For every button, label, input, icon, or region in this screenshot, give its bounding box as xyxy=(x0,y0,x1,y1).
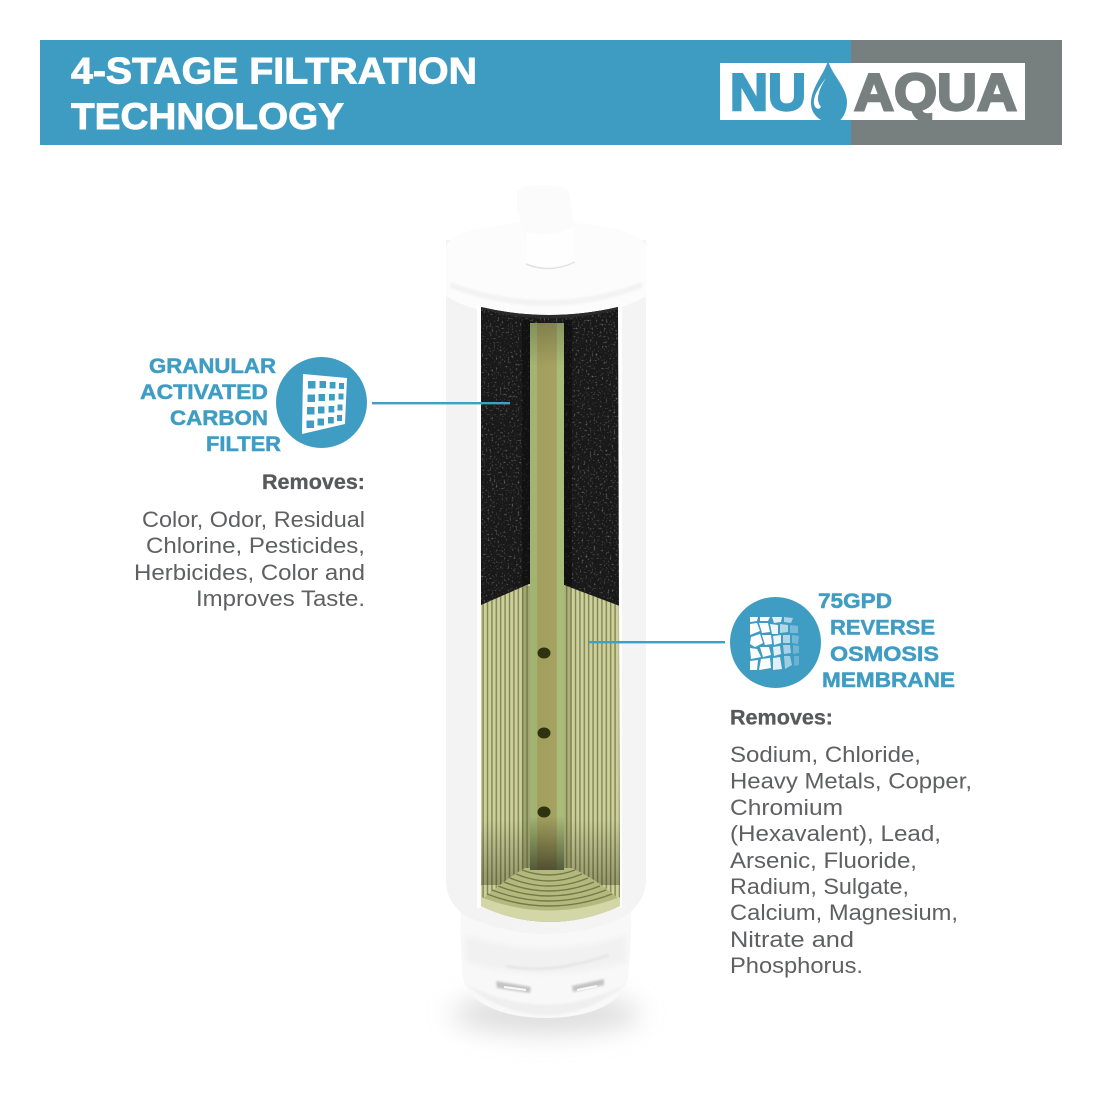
text block: membrane removes: Removes: xyxy=(730,706,833,730)
front disc xyxy=(481,897,620,923)
callout line: membrane xyxy=(589,641,725,643)
inner wall trim xyxy=(477,306,482,908)
heading: granular activated carbon filter: ACTIVATED xyxy=(140,380,268,404)
filter cartridge cutaway xyxy=(446,185,646,1034)
text block: membrane removes: Calcium, Magnesium, xyxy=(730,900,958,925)
text block: membrane removes: Phosphorus. xyxy=(730,953,863,978)
text block: membrane removes: Nitrate and xyxy=(730,927,854,952)
floor shadow xyxy=(451,994,641,1034)
text block: membrane removes: (Hexavalent), Lead, xyxy=(730,821,941,846)
text block: carbon filter removes: Improves Taste. xyxy=(196,586,365,611)
heading: 75GPD reverse osmosis membrane: 75GPD xyxy=(818,589,892,613)
logo: Nu Aqua: AQUA xyxy=(854,64,1017,122)
center tube xyxy=(530,323,564,870)
header banner xyxy=(40,40,1062,145)
title: 4-STAGE FILTRATION xyxy=(71,50,477,92)
carbon layer xyxy=(481,300,620,620)
base connector xyxy=(461,905,631,1018)
membrane floor xyxy=(481,868,620,922)
heading: 75GPD reverse osmosis membrane: OSMOSIS xyxy=(830,642,939,666)
text block: carbon filter removes xyxy=(134,471,365,611)
heading: granular activated carbon filter: FILTER xyxy=(206,432,281,456)
text block: membrane removes: Sodium, Chloride, xyxy=(730,742,921,767)
text block: membrane removes: Radium, Sulgate, xyxy=(730,874,909,899)
window contents xyxy=(481,300,620,940)
text block: membrane removes: Chromium xyxy=(730,795,843,820)
text block: carbon filter removes: Removes: xyxy=(262,471,365,494)
logo: Nu Aqua: NU xyxy=(730,64,806,122)
top handle xyxy=(517,185,575,269)
water slots xyxy=(496,981,531,993)
heading: granular activated carbon filter: GRANULAR xyxy=(149,354,276,378)
outer housing xyxy=(446,240,646,934)
logo: Nu Aqua xyxy=(720,61,1025,123)
text block: membrane removes: Heavy Metals, Copper, xyxy=(730,768,972,794)
heading: 75GPD reverse osmosis membrane: MEMBRANE xyxy=(822,668,955,692)
icon: reverse osmosis membrane xyxy=(730,597,821,688)
cap xyxy=(446,222,646,318)
heading: 75GPD reverse osmosis membrane: REVERSE xyxy=(830,616,935,640)
heading: 75GPD reverse osmosis membrane xyxy=(818,589,955,692)
heading: granular activated carbon filter: CARBON xyxy=(170,406,268,430)
text block: membrane removes xyxy=(730,706,972,978)
title xyxy=(71,50,477,137)
icon: carbon filter grid xyxy=(276,357,367,448)
text block: carbon filter removes: Chlorine, Pesticides, xyxy=(146,533,365,558)
text block: membrane removes: Arsenic, Fluoride, xyxy=(730,848,917,873)
text block: carbon filter removes: Herbicides, Color and xyxy=(134,560,365,585)
heading: granular activated carbon filter xyxy=(140,354,281,456)
RO membrane pleats xyxy=(481,584,620,940)
callout line: carbon xyxy=(372,402,510,404)
text block: carbon filter removes: Color, Odor, Residual xyxy=(142,507,365,532)
title: TECHNOLOGY xyxy=(71,95,344,137)
